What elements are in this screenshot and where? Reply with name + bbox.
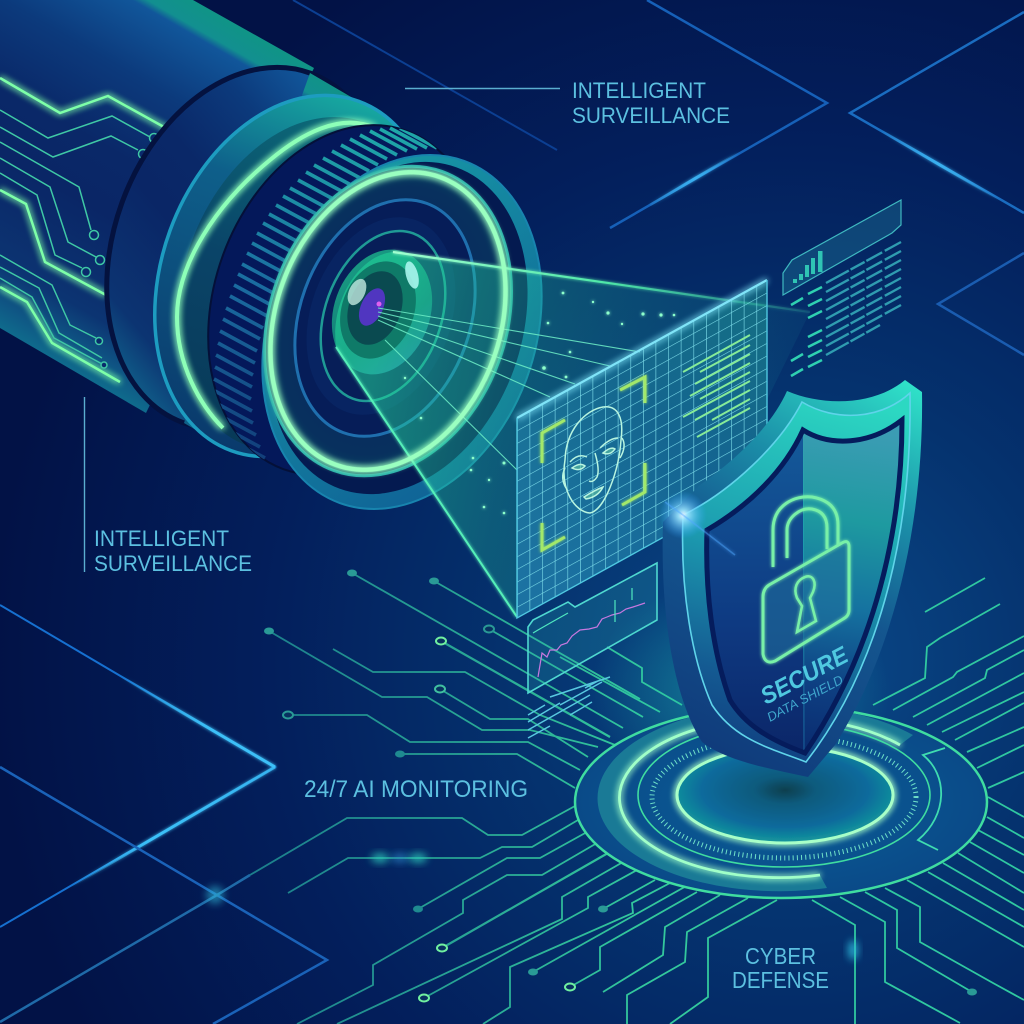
signal header: [783, 200, 901, 295]
shield inner left face: [707, 430, 803, 753]
barrel circuit traces: [0, 78, 173, 382]
platform bright arc: [619, 718, 900, 878]
streak lines under chart: [528, 677, 610, 738]
label: intelligent surveillance top: INTELLIGENT: [572, 78, 706, 103]
lens flare: [659, 491, 735, 555]
knurled ring: [207, 124, 444, 474]
padlock: [763, 497, 849, 662]
face outline: [563, 407, 624, 513]
beam data points: [404, 292, 675, 514]
collar: [58, 28, 436, 468]
lens pupil: [327, 251, 429, 369]
glowing centre ring: [677, 747, 893, 843]
label: intelligent surveillance left: SURVEILLANCE: [94, 551, 252, 576]
platform crescent band: [598, 705, 913, 891]
platform right brackets: [918, 748, 945, 850]
trace end nodes: [264, 570, 977, 1002]
shield front rim: [683, 393, 910, 762]
lens housing: [215, 115, 589, 549]
label: cyber defense: [732, 943, 829, 993]
leader line: top: [405, 88, 560, 90]
light beam: [327, 251, 810, 617]
lens glass layers: [230, 139, 546, 503]
label: intelligent surveillance left: INTELLIGENT: [94, 526, 229, 551]
signal bars: [793, 251, 822, 283]
tick ring: [652, 736, 916, 858]
shield text: secure: SECURE: [756, 641, 854, 710]
glowing back ring arc: [177, 123, 375, 428]
shield: [659, 380, 922, 777]
camera: [0, 0, 543, 510]
shield inner right face: [803, 420, 902, 753]
label: cyber defense: DEFENSE: [732, 967, 829, 993]
label: intelligent surveillance top: SURVEILLANCE: [572, 103, 730, 128]
collar front ring: [106, 56, 484, 496]
label: cyber defense: CYBER: [745, 943, 816, 969]
chart line: [538, 603, 645, 677]
leader line: left: [84, 397, 86, 572]
traces right and below: [812, 578, 1024, 1024]
platform: [575, 580, 987, 898]
shield inner outline: [707, 420, 902, 753]
stock chart panel: [528, 563, 657, 738]
circuit traces around the platform: [250, 573, 777, 1024]
label: 24/7 monitoring: 24/7 AI MONITORING: [304, 776, 528, 803]
face recognition panel: [517, 280, 767, 618]
data readout panel: [783, 200, 901, 376]
inner thin ring: [638, 723, 930, 867]
shield text: data shield: DATA SHIELD: [764, 672, 846, 725]
shield side: [663, 380, 922, 777]
beam edges: [393, 252, 810, 312]
panel bright edge: [517, 280, 767, 418]
panel text lines: [683, 335, 750, 437]
label: intelligent surveillance left: [94, 526, 252, 576]
readout text lines: [826, 242, 901, 355]
face bracket corners: [542, 377, 645, 550]
camera barrel: [0, 0, 314, 413]
readout left labels: [791, 287, 822, 376]
platform outer ring: [575, 706, 987, 898]
glowing front lens ring: [230, 139, 546, 503]
beam rays: [378, 308, 640, 470]
scan grid: [517, 280, 767, 618]
label: intelligent surveillance top: [572, 78, 730, 128]
